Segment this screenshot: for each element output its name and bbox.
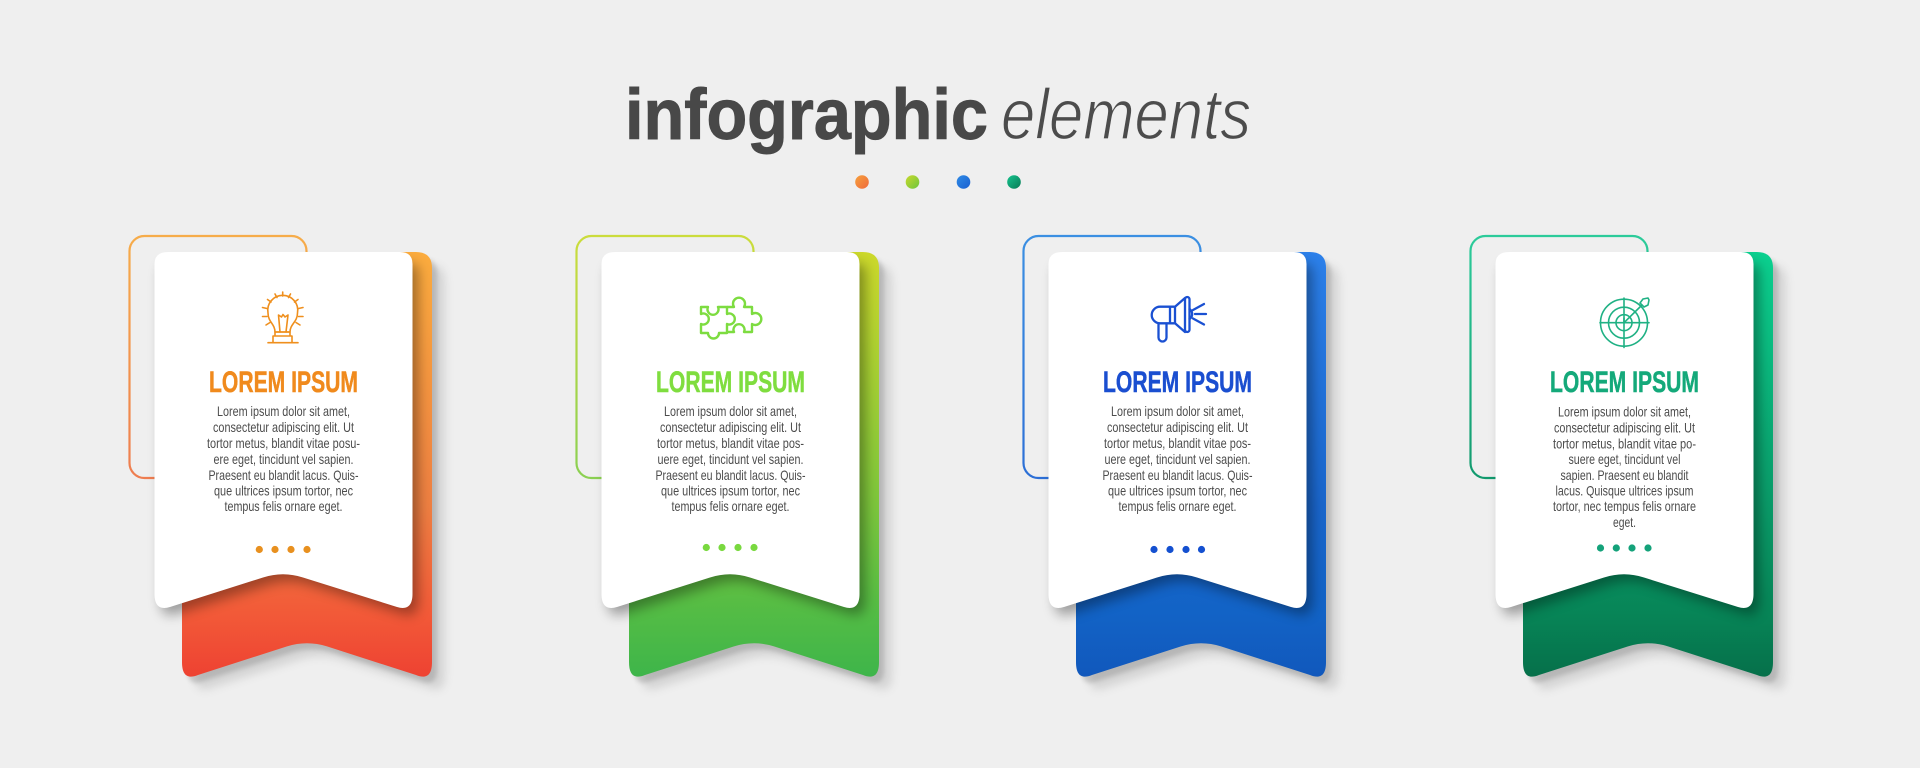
icon: light bulb	[262, 292, 303, 343]
title colour dots	[855, 175, 1021, 189]
body text: tempus felis ornare eget.	[672, 499, 790, 514]
body text: tempus felis ornare eget.	[224, 499, 342, 514]
pagination dots	[703, 544, 758, 551]
heading: LOREM IPSUM	[1550, 366, 1699, 399]
heading: LOREM IPSUM	[209, 366, 358, 399]
body text: consectetur adipiscing elit. Ut	[213, 420, 354, 435]
icon: megaphone	[1152, 297, 1206, 342]
body text	[1553, 404, 1696, 530]
body text: Praesent eu blandit lacus. Quis-	[208, 468, 358, 483]
body text: lacus. Quisque ultrices ipsum	[1556, 484, 1694, 498]
white card	[1496, 252, 1754, 608]
outline frame	[1024, 236, 1200, 478]
ribbon shadow	[187, 258, 445, 690]
body text: que ultrices ipsum tortor, nec	[1108, 484, 1247, 498]
body text: eget.	[1613, 515, 1636, 530]
body text: uere eget, tincidunt vel sapien.	[658, 452, 804, 467]
body text: tortor metus, blandit vitae pos-	[657, 436, 804, 451]
pagination dots	[1597, 544, 1652, 552]
body text: tortor metus, blandit vitae posu-	[207, 436, 360, 451]
body text: tortor, nec tempus felis ornare	[1553, 499, 1696, 514]
card shadow	[1502, 263, 1760, 615]
title	[625, 76, 1251, 155]
body text: tortor metus, blandit vitae po-	[1553, 436, 1696, 452]
body text: Praesent eu blandit lacus. Quis-	[656, 468, 806, 483]
pagination dots	[256, 546, 311, 553]
body text: Lorem ipsum dolor sit amet,	[1111, 404, 1244, 419]
heading: LOREM IPSUM	[1103, 366, 1252, 399]
body text	[1102, 404, 1252, 514]
outline frame	[576, 236, 754, 478]
panel: card 3 blue	[1024, 236, 1339, 690]
body text: Lorem ipsum dolor sit amet,	[217, 404, 350, 419]
panel: card 4 teal	[1470, 236, 1786, 690]
white card	[1048, 252, 1306, 608]
ribbon	[182, 252, 432, 677]
ribbon	[1076, 252, 1326, 677]
body text: uere eget, tincidunt vel sapien.	[1104, 452, 1250, 467]
body text: tortor metus, blandit vitae pos-	[1104, 436, 1251, 451]
card shadow	[608, 263, 866, 615]
body text: consectetur adipiscing elit. Ut	[1107, 420, 1248, 435]
body text: ere eget, tincidunt vel sapien.	[214, 452, 354, 467]
pagination dots	[1150, 546, 1205, 553]
panel: card 2 green	[576, 236, 892, 690]
ribbon shadow	[1528, 258, 1786, 690]
body text: que ultrices ipsum tortor, nec	[214, 484, 353, 498]
body text: tempus felis ornare eget.	[1118, 499, 1236, 514]
title: infographic	[625, 76, 988, 155]
ribbon shadow	[1081, 258, 1339, 690]
body text	[656, 404, 806, 514]
ribbon	[1523, 252, 1773, 677]
white card	[154, 252, 412, 608]
body text: sapien. Praesent eu blandit	[1560, 468, 1689, 483]
ribbon	[629, 252, 879, 677]
body text: suere eget, tincidunt vel	[1568, 452, 1680, 467]
body text: consectetur adipiscing elit. Ut	[660, 420, 801, 435]
outline frame	[130, 236, 306, 478]
icon: puzzle pieces	[701, 298, 761, 338]
ribbon shadow	[634, 258, 892, 690]
body text: Lorem ipsum dolor sit amet,	[664, 404, 797, 419]
card shadow	[1054, 263, 1312, 615]
body text: consectetur adipiscing elit. Ut	[1554, 420, 1695, 436]
outline frame	[1470, 236, 1648, 478]
icon: target with arrow	[1600, 298, 1649, 348]
white card	[602, 252, 860, 608]
body text: Praesent eu blandit lacus. Quis-	[1102, 468, 1252, 483]
body text: Lorem ipsum dolor sit amet,	[1558, 404, 1691, 420]
body text: que ultrices ipsum tortor, nec	[661, 484, 800, 498]
body text	[207, 404, 360, 514]
title: elements	[1001, 76, 1251, 155]
card shadow	[160, 263, 418, 615]
panel: card 1 orange	[130, 236, 445, 690]
heading: LOREM IPSUM	[656, 366, 805, 399]
